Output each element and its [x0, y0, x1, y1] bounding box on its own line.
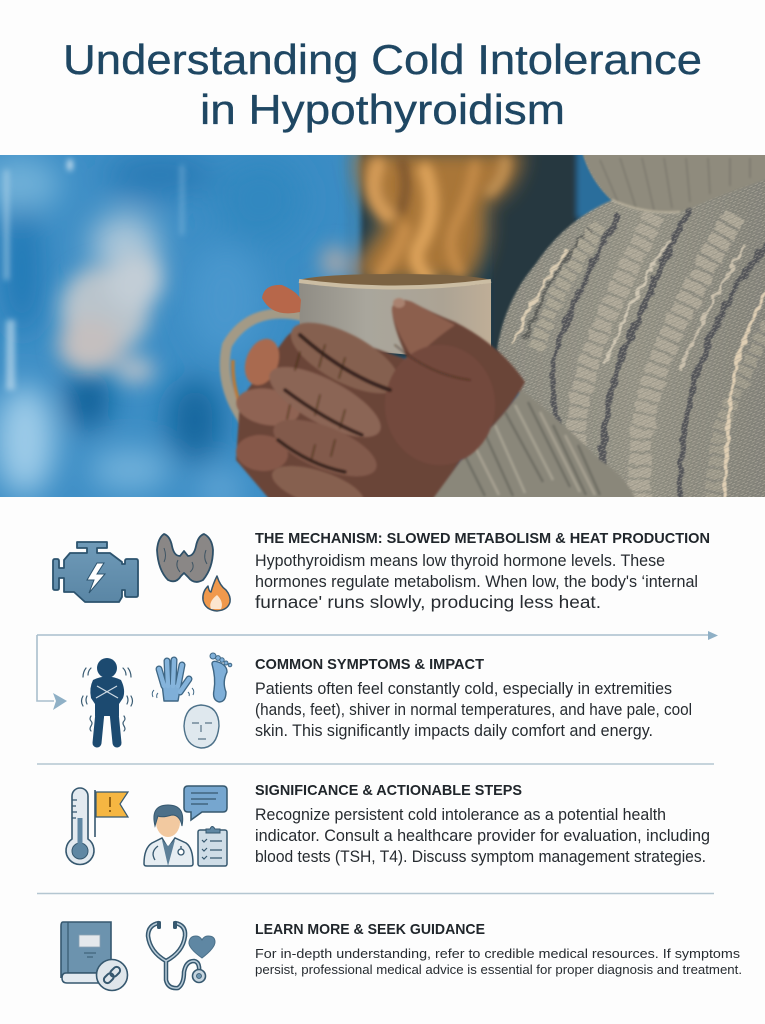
section 2 text: COMMON SYMPTOMS & IMPACT: [255, 656, 484, 673]
window frame: [345, 150, 617, 360]
section 1 text: furnace' runs slowly, producing less heat.: [255, 592, 601, 612]
section 1 text: THE MECHANISM: SLOWED METABOLISM & HEAT PRODUCTION: [255, 530, 710, 547]
section 1 text: Hypothyroidism means low thyroid hormone levels. These: [255, 552, 665, 570]
icon: speech bubble: [184, 786, 227, 820]
divider lines: [37, 764, 714, 894]
section 2 text: (hands, feet), shiver in normal temperatures, and have pale, cool: [255, 701, 692, 719]
icon: stethoscope: [148, 921, 206, 988]
icon: clipboard checklist: [198, 826, 227, 866]
section 2 text: Patients often feel constantly cold, especially in extremities: [255, 680, 672, 698]
far-hand finger tip: [262, 285, 301, 313]
icon: thyroid gland: [157, 534, 213, 582]
title: [63, 36, 702, 133]
section 3 text: [255, 782, 710, 866]
sweater collar: [582, 150, 765, 212]
title: in Hypothyroidism: [200, 86, 565, 133]
icon: thermometer: [66, 788, 94, 864]
section 3 text: SIGNIFICANCE & ACTIONABLE STEPS: [255, 782, 522, 799]
sweater cuff: [425, 390, 636, 500]
section 4 text: For in-depth understanding, refer to credible medical resources. If symptoms: [255, 946, 740, 961]
icon: cold hand: [152, 660, 194, 701]
icon: warning flag: [95, 790, 128, 837]
section 2 text: skin. This significantly impacts daily comfort and energy.: [255, 722, 653, 740]
frosty window blotches: [0, 153, 305, 514]
hero photo: hands holding a steaming mug by a frosty window: [0, 155, 765, 497]
sweater body: [497, 150, 765, 500]
icon: doctor: [144, 805, 193, 866]
icon: heart: [189, 936, 215, 958]
section 3 text: indicator. Consult a healthcare provider for evaluation, including: [255, 827, 710, 845]
mug handle: [225, 314, 302, 432]
mug: [299, 283, 491, 354]
section 4 text: persist, professional medical advice is essential for proper diagnosis and treatment.: [255, 962, 742, 977]
icon: flame: [203, 576, 230, 611]
icon: shivering person: [82, 658, 132, 743]
section 4 text: [255, 921, 742, 977]
section 4 text: LEARN MORE & SEEK GUIDANCE: [255, 921, 485, 938]
icon: cold foot: [210, 653, 232, 702]
sweater cables: [513, 205, 765, 505]
title: Understanding Cold Intolerance: [63, 36, 702, 83]
hand: [233, 298, 525, 519]
icon: medical book with link: [61, 922, 128, 990]
icon: pale face: [184, 705, 219, 748]
arrow connector: section one to two: [37, 631, 718, 710]
section 3 text: Recognize persistent cold intolerance as a potential health: [255, 806, 666, 824]
section 3 text: blood tests (TSH, T4). Discuss symptom management strategies.: [255, 848, 706, 866]
icon: engine with lightning bolt: [53, 542, 138, 602]
section 1 text: [255, 530, 710, 612]
steam: [321, 150, 522, 282]
section 1 text: hormones regulate metabolism. When low, the body's ‘internal: [255, 573, 698, 591]
section 2 text: [255, 656, 692, 740]
